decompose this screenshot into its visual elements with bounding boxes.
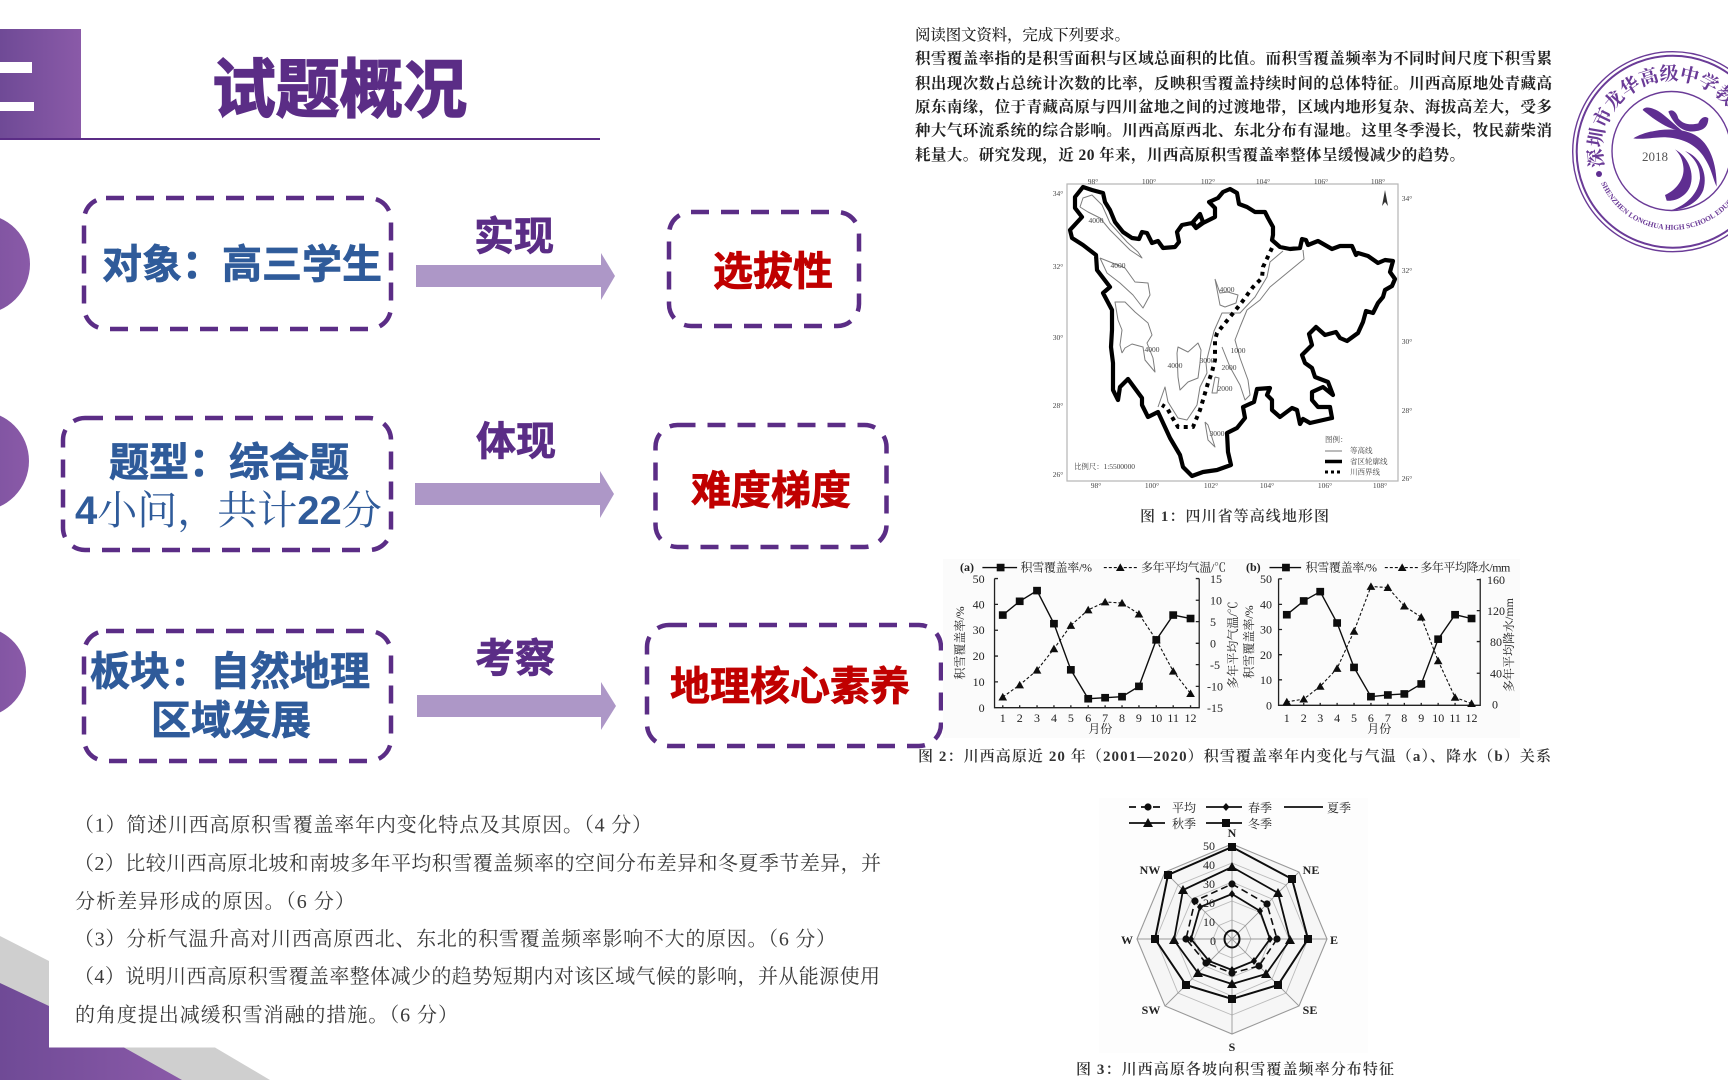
- map graticule labels: 34°: [1402, 194, 1412, 203]
- month labels: 11: [1167, 711, 1179, 725]
- month labels: 7: [1385, 711, 1391, 725]
- map graticule labels: 100°: [1142, 177, 1156, 186]
- map graticule labels: 28°: [1402, 406, 1412, 415]
- chart a axis numbers: -15: [1207, 701, 1223, 715]
- row 1: arrow with label: 实现: [474, 215, 554, 259]
- month labels: 3: [1317, 711, 1323, 725]
- row 1: result: [669, 212, 859, 326]
- chart b axis numbers: 0: [1492, 698, 1498, 712]
- figure 1 caption: 图 1：四川省等高线地形图: [1140, 507, 1329, 525]
- chart a axis numbers: 10: [973, 675, 985, 689]
- reading material text: 原东南缘，位于青藏高原与四川盆地之间的过渡地带，区域内地形复杂、海拔高差大，受多: [915, 97, 1552, 117]
- map graticule labels: 26°: [1402, 474, 1412, 483]
- map shapes: [1070, 187, 1395, 476]
- map legend: 省区轮廓线: [1350, 456, 1388, 466]
- reading material text: 耗量大。研究发现，近 20 年来，川西高原积雪覆盖率整体呈缓慢减少的趋势。: [915, 145, 1465, 165]
- month labels: 2: [1301, 711, 1307, 725]
- reading material text: [915, 26, 1552, 165]
- row 2 circle: [0, 411, 29, 511]
- map graticule labels: [1053, 177, 1412, 490]
- title: 试题概况: [212, 54, 467, 126]
- month labels: 12: [1184, 711, 1196, 725]
- row 3: result: 地理核心素养: [670, 665, 910, 709]
- reading material text: 种大气环流系统的综合影响。川西高原西北、东北分布有湿地。这里冬季漫长，牧民薪柴消: [915, 120, 1552, 140]
- map legend: 图例：: [1325, 434, 1348, 444]
- contour value labels: 1000: [1230, 346, 1246, 355]
- row 1: result: 选拔性: [713, 250, 833, 294]
- month labels: 9: [1136, 711, 1142, 725]
- radar direction labels: NE: [1303, 863, 1319, 877]
- chart a axis numbers: 0: [1210, 636, 1216, 650]
- contour value labels: 4000: [1144, 345, 1160, 354]
- chart legends: 多年平均降水/mm: [1420, 560, 1511, 574]
- map graticule labels: 100°: [1145, 481, 1159, 490]
- month labels: 5: [1351, 711, 1357, 725]
- radar background: [1099, 798, 1368, 1053]
- chart legends: 积雪覆盖率/%: [1020, 560, 1092, 574]
- chart b axis numbers: 40: [1490, 666, 1502, 680]
- contour value labels: 4000: [1088, 216, 1104, 225]
- chart b axis numbers: [1260, 572, 1505, 712]
- radar legend: [1129, 800, 1351, 831]
- chart legends: 多年平均气温/℃: [1141, 560, 1226, 574]
- map scale: 比例尺：1:5500000: [1074, 461, 1135, 471]
- contour value labels: 3000: [1210, 429, 1225, 438]
- month labels: 12: [1466, 711, 1478, 725]
- row 3: topic: 板块：自然地理: [90, 650, 370, 694]
- radar legend: 秋季: [1172, 816, 1196, 831]
- north arrow: [1382, 190, 1388, 206]
- logo year: 2018: [1642, 149, 1668, 164]
- row 3: arrow with label: [417, 637, 616, 730]
- logo dot: [1596, 171, 1602, 177]
- chart a axis numbers: -5: [1210, 658, 1220, 672]
- month labels: 8: [1401, 711, 1407, 725]
- map graticule labels: 106°: [1318, 481, 1332, 490]
- month labels: 3: [1034, 711, 1040, 725]
- month labels: 8: [1119, 711, 1125, 725]
- rotated axis titles: 积雪覆盖率/%: [952, 606, 967, 680]
- row 3 circle: [0, 626, 26, 718]
- radar legend: 平均: [1172, 801, 1196, 815]
- month labels: 6: [1368, 711, 1374, 725]
- map graticule labels: 28°: [1053, 401, 1063, 410]
- radar legend: 冬季: [1248, 816, 1272, 831]
- reading material text: 积雪覆盖率指的是积雪面积与区域总面积的比值。而积雪覆盖频率为不同时间尺度下积雪累: [915, 48, 1552, 68]
- section number tab: [0, 29, 81, 139]
- row 1: object: [84, 198, 391, 329]
- month labels: 5: [1068, 711, 1074, 725]
- row 3: topic: [84, 631, 391, 761]
- map graticule labels: 104°: [1256, 177, 1270, 186]
- exam questions: 的角度提出减缓积雪消融的措施。（6 分）: [75, 1004, 458, 1026]
- month labels: 11: [1449, 711, 1461, 725]
- chart a axis numbers: 20: [973, 649, 985, 663]
- row 2: result: 难度梯度: [691, 469, 851, 513]
- chart legends: (b): [1246, 560, 1261, 574]
- chart a axis numbers: 10: [1210, 594, 1222, 608]
- map graticule labels: 34°: [1053, 189, 1063, 198]
- radar direction labels: W: [1121, 933, 1133, 947]
- row 2: result: [656, 425, 886, 547]
- radar scale labels: [1203, 839, 1216, 948]
- contour value labels: 2000: [1218, 384, 1233, 393]
- map graticule labels: 102°: [1204, 481, 1218, 490]
- month labels: 10: [1150, 711, 1162, 725]
- logo emblem: [1633, 108, 1717, 210]
- radar direction labels: S: [1229, 1040, 1236, 1054]
- radar direction labels: SE: [1303, 1003, 1317, 1017]
- title underline: [0, 138, 600, 140]
- map graticule labels: 30°: [1402, 337, 1412, 346]
- radar plot: [1137, 843, 1327, 1034]
- row 2: question type: 题型：综合题: [109, 441, 349, 485]
- contour value labels: 2000: [1222, 363, 1237, 372]
- month labels: 月份: [1088, 722, 1112, 736]
- figure 2: snow cover charts: [943, 559, 1520, 738]
- figure 3: radar chart: [1099, 798, 1368, 1054]
- row 2: arrow with label: [415, 420, 614, 518]
- chart b axis numbers: 40: [1260, 598, 1272, 612]
- radar direction labels: [1121, 826, 1338, 1054]
- chart a axis numbers: -10: [1207, 680, 1223, 694]
- figure 1: Sichuan contour map: [1053, 177, 1412, 490]
- chart legends: [960, 560, 1511, 574]
- month labels: [1000, 711, 1478, 736]
- map graticule labels: 108°: [1371, 177, 1385, 186]
- chart a axis numbers: [973, 572, 1223, 715]
- radar direction labels: N: [1228, 826, 1237, 840]
- map legend: [1325, 434, 1388, 476]
- chart b axis numbers: 10: [1260, 673, 1272, 687]
- contour value labels: 3000: [1200, 356, 1215, 365]
- radar direction labels: E: [1330, 933, 1338, 947]
- map graticule labels: 108°: [1373, 481, 1387, 490]
- row 1: object: 对象：高三学生: [102, 243, 382, 287]
- map graticule labels: 26°: [1053, 470, 1063, 479]
- reading material text: 阅读图文资料，完成下列要求。: [915, 26, 1130, 44]
- row 2: question type: 4小问，共计22分: [75, 479, 382, 536]
- map legend: 等高线: [1350, 445, 1373, 455]
- exam questions: 分析差异形成的原因。（6 分）: [75, 890, 355, 913]
- row 1 circle: [0, 214, 30, 314]
- rotated axis titles: [952, 597, 1516, 692]
- figure 2 caption: 图 2：川西高原近 20 年（2001—2020）积雪覆盖率年内变化与气温（a）、降水（b）关系: [918, 747, 1551, 765]
- map graticule labels: 98°: [1091, 481, 1101, 490]
- chart b axis numbers: 20: [1260, 648, 1272, 662]
- month labels: 4: [1334, 711, 1340, 725]
- chart a axis numbers: 40: [973, 598, 985, 612]
- radar scale labels: 10: [1203, 915, 1215, 929]
- month labels: 2: [1017, 711, 1023, 725]
- exam questions: （2）比较川西高原北坡和南坡多年平均积雪覆盖频率的空间分布差异和冬夏季节差异，并: [74, 852, 881, 875]
- exam questions: （1）简述川西高原积雪覆盖率年内变化特点及其原因。（4 分）: [74, 814, 652, 836]
- month labels: 4: [1051, 711, 1057, 725]
- chart lines: [982, 563, 1480, 708]
- exam questions: （4）说明川西高原积雪覆盖率整体减少的趋势短期内对该区域气候的影响，并从能源使用: [74, 965, 880, 988]
- radar scale labels: 40: [1203, 858, 1215, 872]
- month labels: 10: [1432, 711, 1444, 725]
- chart a axis numbers: 30: [973, 623, 985, 637]
- map graticule labels: 32°: [1402, 266, 1412, 275]
- map graticule labels: 106°: [1314, 177, 1328, 186]
- chart a axis numbers: 0: [979, 701, 985, 715]
- month labels: 1: [1284, 711, 1290, 725]
- month labels: 9: [1418, 711, 1424, 725]
- radar scale labels: 30: [1203, 877, 1215, 891]
- row 2: question type: [63, 418, 391, 550]
- chart a axis numbers: 15: [1210, 572, 1222, 586]
- chart b axis numbers: 120: [1487, 604, 1505, 618]
- radar legend: 春季: [1248, 800, 1272, 815]
- chart b axis numbers: 30: [1260, 622, 1272, 636]
- exam questions: [74, 814, 881, 1026]
- map graticule labels: 32°: [1053, 262, 1063, 271]
- map graticule labels: 98°: [1088, 177, 1098, 186]
- exam questions: （3）分析气温升高对川西高原西北、东北的积雪覆盖频率影响不大的原因。（6 分）: [74, 928, 836, 950]
- chart background: [943, 559, 1520, 738]
- row 3: arrow with label: 考察: [475, 637, 555, 681]
- figure 3 caption: 图 3：川西高原各坡向积雪覆盖频率分布特征: [1076, 1060, 1394, 1078]
- row 3: result: [647, 625, 941, 746]
- chart legends: (a): [960, 560, 974, 574]
- chart b axis numbers: 160: [1487, 573, 1505, 587]
- map legend: 川西界线: [1350, 466, 1380, 476]
- chart b axis numbers: 0: [1266, 698, 1272, 712]
- chart legends: 积雪覆盖率/%: [1306, 560, 1377, 574]
- month labels: 1: [1000, 711, 1006, 725]
- rotated axis titles: 积雪覆盖率/%: [1241, 605, 1256, 679]
- radar scale labels: 20: [1203, 896, 1215, 910]
- map graticule labels: 30°: [1053, 333, 1063, 342]
- map graticule labels: 104°: [1260, 481, 1274, 490]
- chart a axis numbers: 50: [973, 572, 985, 586]
- row 2: arrow with label: 体现: [476, 420, 556, 464]
- rotated axis titles: 多年平均降水/mm: [1501, 597, 1516, 692]
- map frame: [1067, 184, 1398, 481]
- contour value labels: 4000: [1110, 261, 1126, 270]
- row 1: arrow with label: [416, 215, 615, 300]
- map graticule labels: 102°: [1201, 177, 1215, 186]
- chart b axis numbers: 50: [1260, 572, 1272, 586]
- radar scale labels: 0: [1210, 934, 1216, 948]
- radar legend: 夏季: [1327, 800, 1351, 815]
- contour value labels: 4000: [1168, 361, 1183, 370]
- radar direction labels: SW: [1142, 1003, 1160, 1017]
- contour value labels: 4000: [1220, 285, 1235, 294]
- chart a axis numbers: 5: [1210, 615, 1216, 629]
- month labels: 7: [1102, 711, 1108, 725]
- reading material text: 积出现次数占总统计次数的比率，反映积雪覆盖持续时间的总体特征。川西高原地处青藏高: [915, 74, 1552, 94]
- radar direction labels: NW: [1140, 863, 1160, 877]
- school logo: [1572, 51, 1728, 252]
- radar scale labels: 50: [1203, 839, 1215, 853]
- month labels: 6: [1085, 711, 1091, 725]
- corner decoration: [0, 936, 270, 1080]
- contour value labels: [1088, 216, 1246, 438]
- row 3: topic: 区域发展: [151, 699, 311, 743]
- rotated axis titles: 多年平均气温/℃: [1225, 601, 1240, 689]
- chart b axis numbers: 80: [1490, 635, 1502, 649]
- month labels: 月份: [1367, 722, 1391, 736]
